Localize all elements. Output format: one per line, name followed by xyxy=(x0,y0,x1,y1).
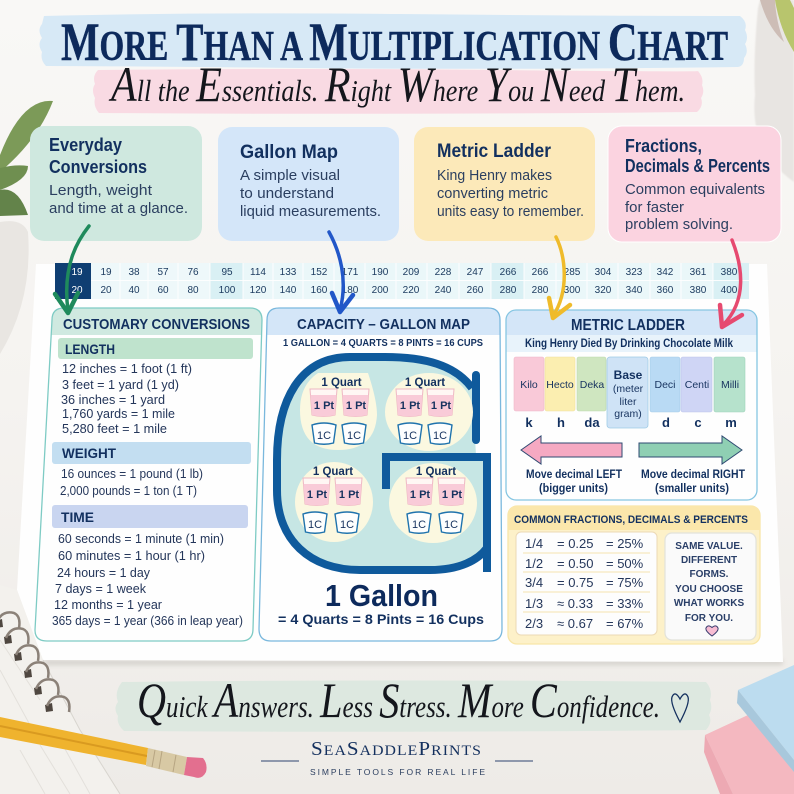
panel: customary conversions: 2,000 pounds = 1 ton (1 T) xyxy=(60,484,197,498)
decor: plant pot right xyxy=(754,0,794,182)
multiplication table strip: 180 xyxy=(342,285,359,296)
decor: sticky notes xyxy=(704,665,794,794)
panel: customary conversions: 24 hours = 1 day xyxy=(57,566,151,580)
callout: same value xyxy=(665,533,756,640)
fraction table: 1/2 xyxy=(525,556,543,571)
card: metric ladder: units easy to remember. xyxy=(437,204,584,220)
panel: customary conversions: 16 ounces = 1 pound (1 lb) xyxy=(61,467,203,481)
panel: capacity gallon map xyxy=(259,308,502,641)
multiplication table strip: 57 xyxy=(157,267,169,278)
fraction table: = 0.75 xyxy=(557,575,594,590)
fraction table: = 67% xyxy=(606,616,644,631)
panel: metric ladder: k xyxy=(525,415,533,430)
quart top-left: 1C xyxy=(317,430,331,442)
multiplication table strip: 209 xyxy=(403,267,420,278)
panel: customary conversions: 1,760 yards = 1 mile xyxy=(62,407,175,421)
callout: same value: SAME VALUE. xyxy=(675,541,743,552)
card: everyday conversions: Length, weight xyxy=(49,183,152,199)
arrow: red xyxy=(720,240,742,327)
panel: capacity gallon map: = 4 Quarts = 8 Pints = 16 Cups xyxy=(278,611,484,627)
card: fractions: problem solving. xyxy=(625,217,733,233)
multiplication table strip: 220 xyxy=(403,285,420,296)
quart top-left: 1 Pt xyxy=(346,400,366,412)
decor: sheet shadow xyxy=(44,660,783,665)
quart bottom-left: 1C xyxy=(308,519,322,531)
multiplication table strip: 260 xyxy=(467,285,484,296)
multiplication table strip: 19 xyxy=(100,267,112,278)
multiplication table strip: 20 xyxy=(71,285,83,296)
multiplication table strip: 20 xyxy=(100,285,112,296)
subtitle band xyxy=(93,69,703,114)
decor: green leaves xyxy=(0,101,53,216)
multiplication table strip: 140 xyxy=(280,285,297,296)
quart bottom-right: 1 Pt xyxy=(442,489,462,501)
multiplication table strip: 360 xyxy=(657,285,674,296)
panel: customary conversions: 36 inches = 1 yard xyxy=(61,393,165,407)
quart top-left: 1 Pt xyxy=(314,400,334,412)
card: everyday conversions: Conversions xyxy=(49,157,147,177)
panel: metric ladder: d xyxy=(662,415,670,430)
panel: metric ladder: Centi xyxy=(685,379,709,391)
multiplication table strip: 285 xyxy=(564,267,581,278)
fraction table: 1/3 xyxy=(525,596,543,611)
quart bottom-left: 1C xyxy=(340,519,354,531)
panel: customary conversions xyxy=(35,308,262,641)
panel: capacity gallon map: 1 Gallon xyxy=(325,578,438,613)
card: metric ladder: Metric Ladder xyxy=(437,141,552,162)
panel: customary conversions: 60 seconds = 1 minute (1 min) xyxy=(58,532,224,546)
quart bottom-right xyxy=(389,463,477,543)
panel: metric ladder: (meter xyxy=(613,383,644,395)
title band xyxy=(40,13,747,69)
fraction table: 1/4 xyxy=(525,536,543,551)
panel: customary conversions: 60 minutes = 1 hour (1 hr) xyxy=(58,549,205,563)
panel: metric ladder: Move decimal RIGHT xyxy=(641,469,745,481)
quart top-right: 1C xyxy=(403,430,417,442)
panel: metric ladder: Milli xyxy=(721,379,739,391)
multiplication table strip: 340 xyxy=(626,285,643,296)
fraction table: = 50% xyxy=(606,556,644,571)
quart top-right: 1C xyxy=(433,430,447,442)
callout: same value: DIFFERENT xyxy=(681,555,737,566)
panel: metric ladder: c xyxy=(694,415,702,430)
multiplication table strip: 133 xyxy=(280,267,297,278)
multiplication table strip: 60 xyxy=(157,285,169,296)
panel: metric ladder: gram) xyxy=(614,408,642,420)
callout: same value: YOU CHOOSE xyxy=(675,584,743,595)
quart bottom-left: 1 Pt xyxy=(339,489,359,501)
panel: customary conversions: CUSTOMARY CONVERSIONS xyxy=(63,316,250,333)
quart bottom-left: 1 Pt xyxy=(307,489,327,501)
card: metric ladder: converting metric xyxy=(437,186,548,202)
decor: notebook xyxy=(0,585,120,794)
multiplication table strip: 38 xyxy=(128,267,140,278)
brand logo xyxy=(261,738,533,777)
subtitle: All the Essentials. Right Where You Need Them. xyxy=(108,56,685,112)
multiplication table strip: 323 xyxy=(626,267,643,278)
card: gallon map: A simple visual xyxy=(240,168,340,184)
multiplication table strip: 40 xyxy=(128,285,140,296)
panel: metric ladder: Deci xyxy=(654,379,676,391)
footer band xyxy=(116,680,711,732)
gallon G shape xyxy=(277,357,487,572)
card: fractions: Fractions, xyxy=(625,136,702,156)
quart bottom-right: 1 Pt xyxy=(410,489,430,501)
panel: metric ladder: King Henry Died By Drinking Chocolate Milk xyxy=(525,338,734,350)
title: MORE THAN A MULTIPLICATION CHART xyxy=(61,12,728,72)
card: everyday conversions: and time at a glance. xyxy=(49,201,188,217)
panel: metric ladder: (bigger units) xyxy=(539,483,608,495)
arrow: green xyxy=(55,226,89,313)
multiplication table strip: 95 xyxy=(221,267,233,278)
fraction table: 2/3 xyxy=(525,616,543,631)
multiplication table strip: 152 xyxy=(311,267,328,278)
brand logo: SIMPLE TOOLS FOR REAL LIFE xyxy=(310,767,485,777)
arrow: gold xyxy=(549,237,570,318)
panel: metric ladder xyxy=(506,310,757,500)
white chart sheet xyxy=(17,264,783,662)
arrow: move left xyxy=(521,436,622,464)
multiplication table strip: 120 xyxy=(250,285,267,296)
fraction table: = 33% xyxy=(606,596,644,611)
fraction table: = 0.50 xyxy=(557,556,594,571)
quart bottom-right: 1C xyxy=(444,519,458,531)
card: everyday conversions xyxy=(30,126,202,241)
card: gallon map: Gallon Map xyxy=(240,142,338,163)
panel: customary conversions: 12 inches = 1 foot (1 ft) xyxy=(62,362,192,376)
card: fractions: for faster xyxy=(625,200,684,216)
panel: metric ladder: m xyxy=(725,415,737,430)
multiplication table strip: 266 xyxy=(532,267,549,278)
multiplication table strip: 342 xyxy=(657,267,674,278)
multiplication table strip: 240 xyxy=(435,285,452,296)
quart top-left: 1 Quart xyxy=(321,377,362,389)
multiplication table strip: 171 xyxy=(342,267,359,278)
quart bottom-left: 1 Quart xyxy=(313,466,353,478)
card: gallon map xyxy=(218,127,399,241)
decor: pencil xyxy=(0,717,207,778)
multiplication table strip: 114 xyxy=(250,267,266,278)
multiplication table strip: 266 xyxy=(500,267,517,278)
panel: metric ladder: da xyxy=(584,415,600,430)
callout: same value: FORMS. xyxy=(690,569,729,580)
quart top-left: 1C xyxy=(347,430,361,442)
panel: customary conversions: 5,280 feet = 1 mile xyxy=(62,422,167,436)
multiplication table strip: 160 xyxy=(311,285,328,296)
panel: customary conversions: 7 days = 1 week xyxy=(55,582,147,596)
panel: metric ladder: liter xyxy=(620,396,637,408)
decor: plant pot left xyxy=(0,221,29,354)
panel: common fractions xyxy=(508,506,760,644)
multiplication table strip: 190 xyxy=(372,267,389,278)
panel: metric ladder: Base xyxy=(614,368,643,382)
panel: customary conversions: TIME xyxy=(61,510,94,525)
card: gallon map: liquid measurements. xyxy=(240,204,381,220)
card: metric ladder xyxy=(414,127,595,241)
quart bottom-right: 1C xyxy=(412,519,426,531)
panel: capacity gallon map: CAPACITY – GALLON MAP xyxy=(297,316,470,333)
multiplication table strip: 300 xyxy=(564,285,581,296)
multiplication table strip: 76 xyxy=(187,267,199,278)
multiplication table strip: 380 xyxy=(690,285,707,296)
arrow: blue xyxy=(329,232,353,312)
brand logo: SEASADDLEPRINTS xyxy=(311,738,482,760)
panel: customary conversions: WEIGHT xyxy=(62,446,117,461)
card: fractions xyxy=(608,126,781,242)
multiplication table strip: 320 xyxy=(595,285,612,296)
multiplication table strip: 19 xyxy=(71,267,83,278)
quart top-right: 1 Quart xyxy=(405,377,445,389)
panel: metric ladder: Move decimal LEFT xyxy=(526,469,622,481)
multiplication table strip xyxy=(55,263,749,299)
fraction table: ≈ 0.67 xyxy=(557,616,593,631)
multiplication table strip: 247 xyxy=(467,267,484,278)
card: metric ladder: King Henry makes xyxy=(437,168,552,184)
icon: heart outline xyxy=(672,694,688,722)
quart top-right xyxy=(385,373,473,451)
panel: metric ladder: METRIC LADDER xyxy=(571,317,685,334)
card: everyday conversions: Everyday xyxy=(49,135,122,155)
panel: capacity gallon map: 1 GALLON = 4 QUARTS = 8 PINTS = 16 CUPS xyxy=(283,338,483,349)
panel: common fractions: COMMON FRACTIONS, DECIMALS & PERCENTS xyxy=(514,514,748,526)
quart top-right: 1 Pt xyxy=(431,400,451,412)
panel: metric ladder: Kilo xyxy=(520,379,538,391)
fraction table: = 25% xyxy=(606,536,644,551)
quart bottom-right: 1 Quart xyxy=(416,466,456,478)
panel: metric ladder: Hecto xyxy=(546,379,574,391)
multiplication table strip: 280 xyxy=(500,285,517,296)
multiplication table strip: 361 xyxy=(690,267,707,278)
callout: same value: WHAT WORKS xyxy=(674,598,745,609)
multiplication table strip: 228 xyxy=(435,267,452,278)
multiplication table strip: 304 xyxy=(595,267,612,278)
multiplication table strip: 200 xyxy=(372,285,389,296)
fraction table: ≈ 0.33 xyxy=(557,596,593,611)
panel: customary conversions: 365 days = 1 year (366 in leap year) xyxy=(52,614,243,628)
multiplication table strip: 400 xyxy=(721,285,738,296)
panel: customary conversions: LENGTH xyxy=(65,342,115,357)
arrow: move right xyxy=(639,436,742,464)
panel: customary conversions: 3 feet = 1 yard (1 yd) xyxy=(62,378,179,392)
footer tagline: Quick Answers. Less Stress. More Confidence. xyxy=(137,672,660,728)
multiplication table strip: 380 xyxy=(721,267,738,278)
quart bottom-left xyxy=(295,462,373,542)
panel: metric ladder: h xyxy=(557,415,565,430)
callout: same value: FOR YOU. xyxy=(685,613,733,624)
panel: metric ladder: (smaller units) xyxy=(655,483,729,495)
multiplication table strip: 100 xyxy=(219,285,236,296)
card: gallon map: to understand xyxy=(240,186,334,202)
fraction table: 3/4 xyxy=(525,575,543,590)
multiplication table strip: 80 xyxy=(187,285,199,296)
panel: metric ladder: Deka xyxy=(580,379,604,391)
multiplication table strip: 280 xyxy=(532,285,549,296)
fraction table xyxy=(516,532,657,635)
panel: customary conversions: 12 months = 1 year xyxy=(54,598,162,612)
quart top-left xyxy=(300,373,377,450)
quart top-right: 1 Pt xyxy=(400,400,420,412)
fraction table: = 0.25 xyxy=(557,536,594,551)
card: fractions: Common equivalents xyxy=(625,182,765,198)
fraction table: = 75% xyxy=(606,575,644,590)
